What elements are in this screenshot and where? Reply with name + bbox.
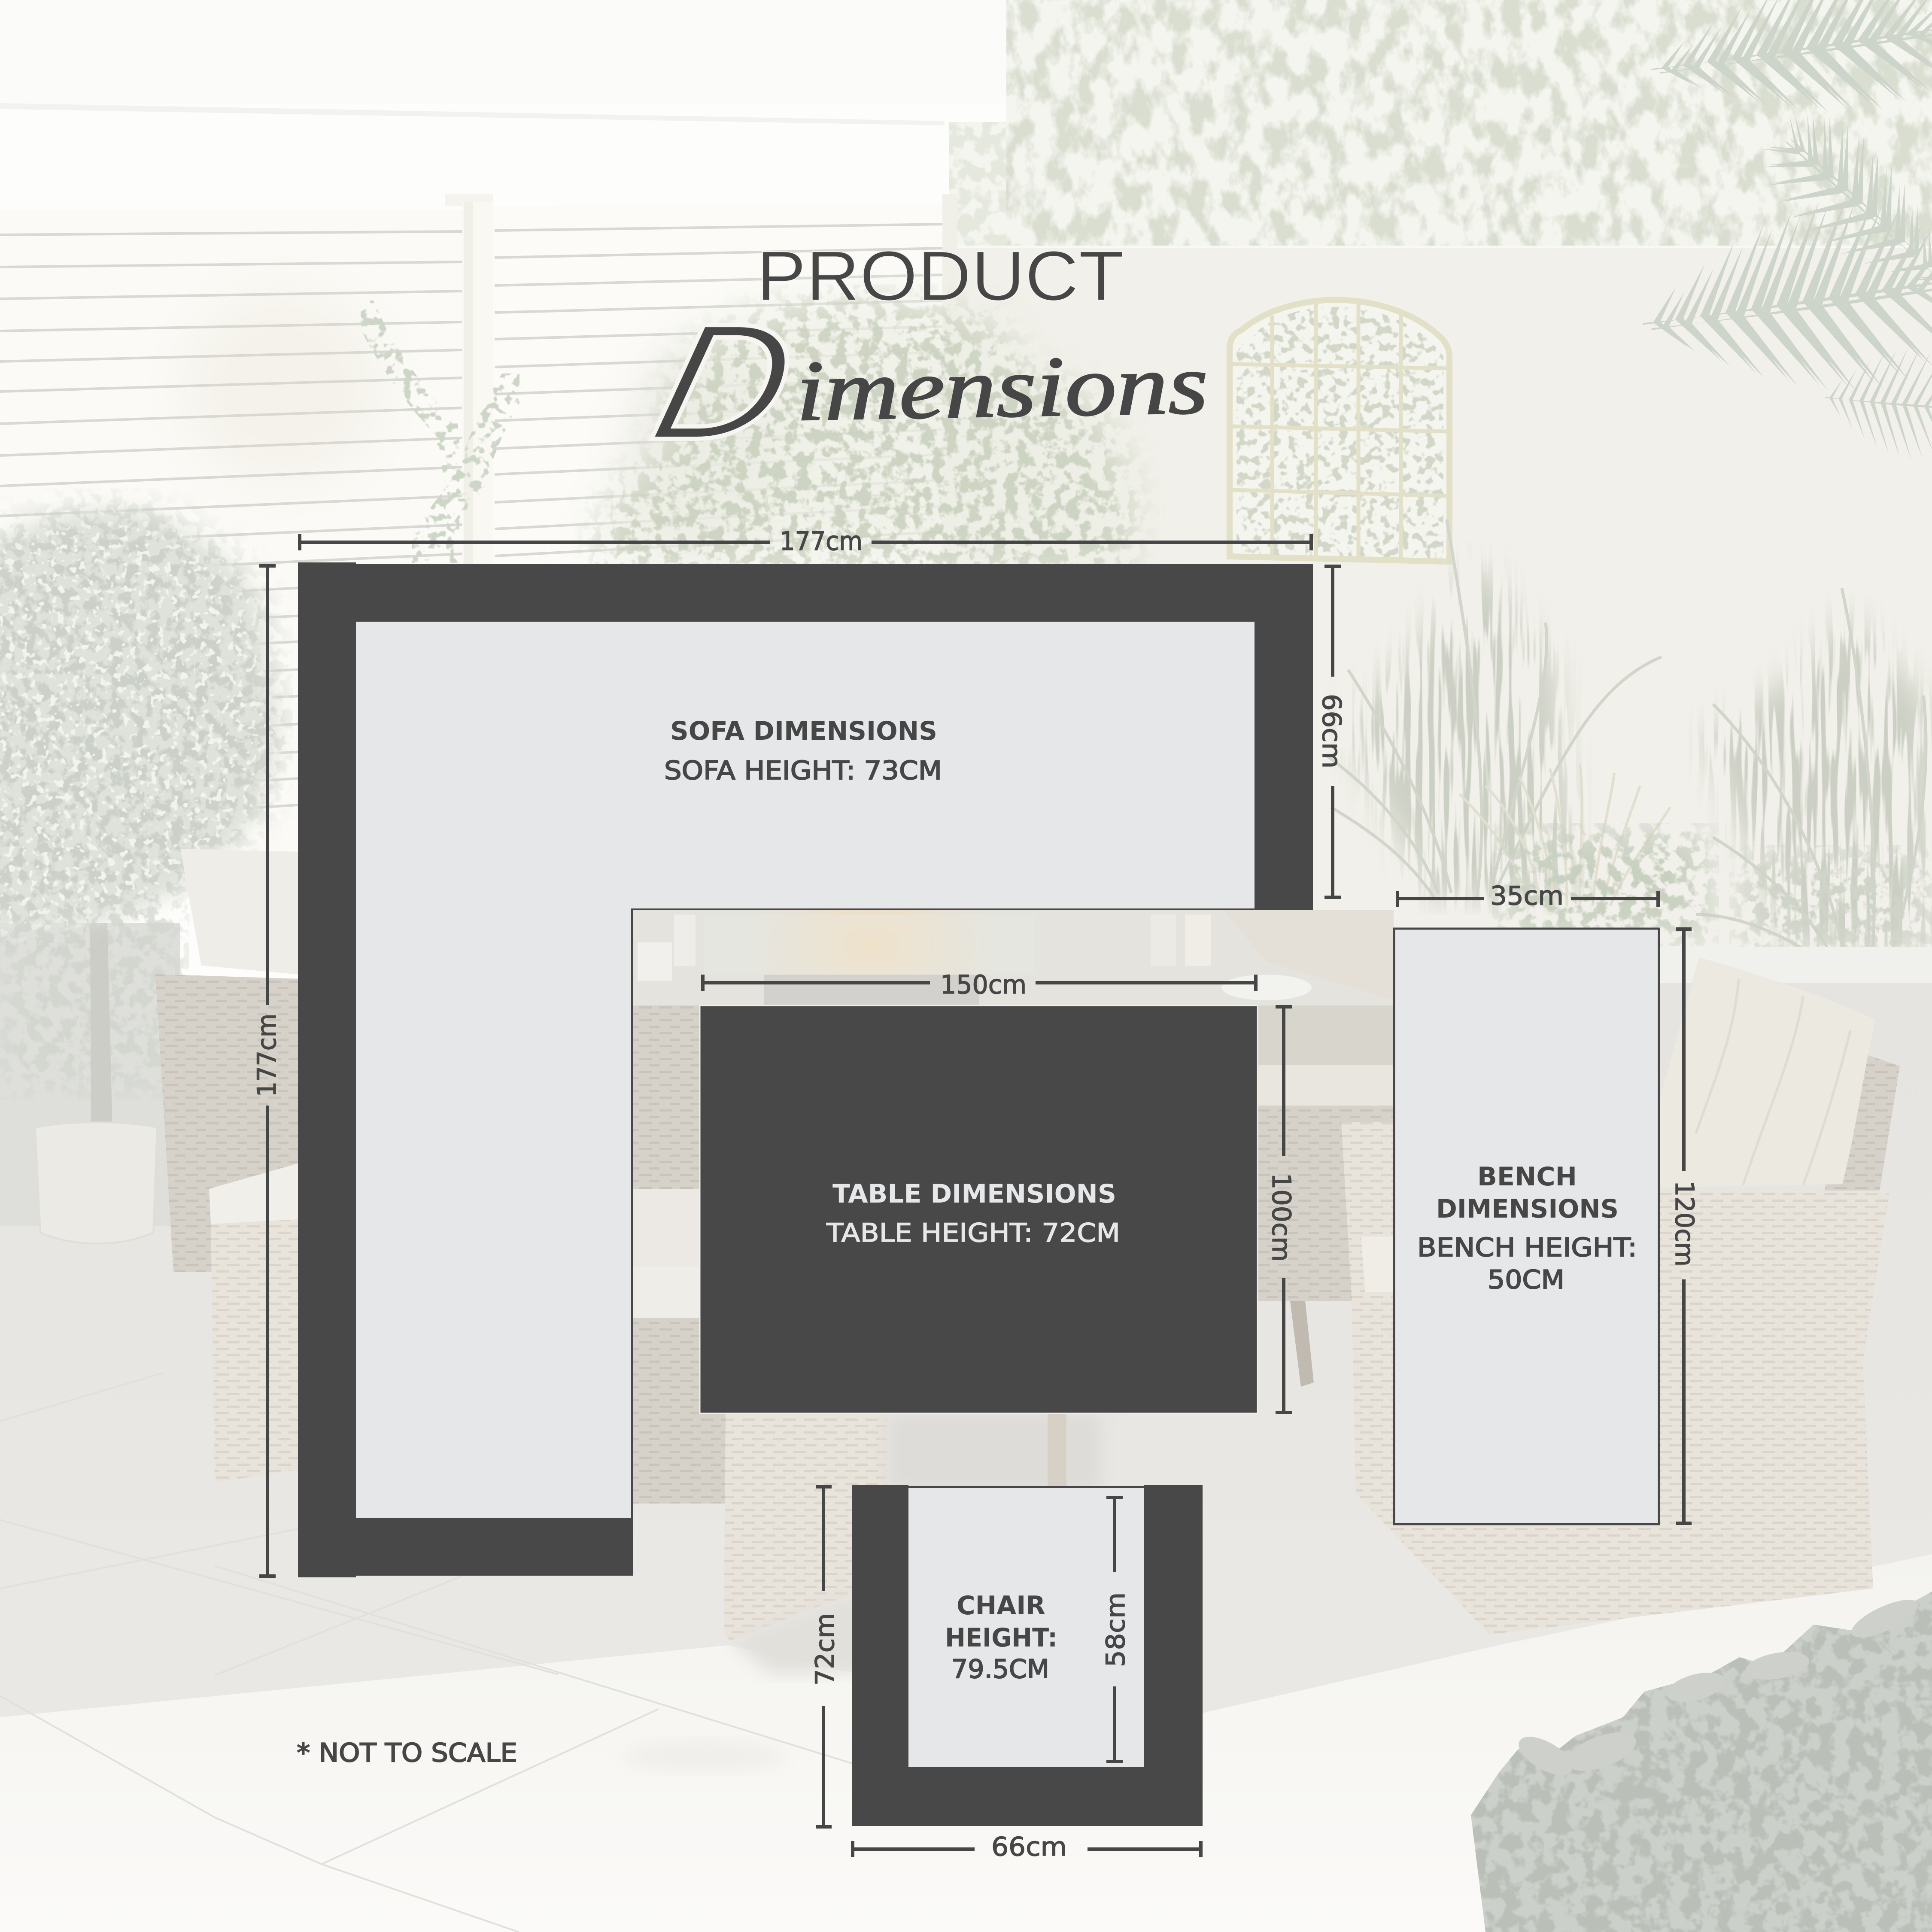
- ferns behind bench: [1503, 829, 1932, 953]
- sofa label: [664, 716, 942, 786]
- dimension: bench length 120cm: [1669, 929, 1699, 1523]
- sofa label: SOFA HEIGHT: 73CM: [664, 756, 942, 786]
- chair label: 79.5CM: [951, 1654, 1049, 1684]
- background foliage top right: [949, 0, 1932, 247]
- dimension: chair inner 58cm: 58cm: [1101, 1592, 1131, 1667]
- fire table scene behind sofa corner: [633, 872, 1394, 1018]
- ornamental grasses: [1327, 519, 1932, 966]
- bench label: BENCH: [1477, 1162, 1577, 1192]
- rendered wall: [945, 246, 1932, 977]
- inner outline of sofa corner: [632, 909, 1255, 1518]
- ivy on fence: [361, 301, 519, 563]
- dimension: bench width 35cm: [1397, 881, 1658, 911]
- dimension: chair width 66cm: 66cm: [991, 1832, 1067, 1862]
- central tree: [598, 298, 1133, 575]
- trunk of ficus: [90, 923, 112, 1133]
- planter hedge on left: [0, 910, 180, 1226]
- title: [638, 237, 1209, 474]
- title script: Dimensions: imensions: [795, 337, 1209, 439]
- chair frame: [852, 1485, 1203, 1826]
- panel: sofa L-shape: [298, 562, 1313, 1577]
- dimension: sofa depth 177cm: 177cm: [252, 1014, 282, 1097]
- low planter ledge: [1660, 947, 1932, 985]
- dimension: sofa depth 177cm: [252, 566, 282, 1577]
- ficus canopy: [0, 510, 278, 932]
- title script: Dimensions: D: [638, 289, 812, 474]
- pergola beam: [0, 0, 1006, 125]
- table label: TABLE DIMENSIONS: [832, 1179, 1116, 1209]
- dimension: bench width 35cm: 35cm: [1490, 881, 1564, 911]
- chair label: CHAIR: [957, 1591, 1045, 1621]
- dimension: sofa arm 66cm: [1316, 566, 1346, 897]
- panel: table: [700, 1005, 1258, 1413]
- dimension: chair inner 58cm: [1101, 1498, 1131, 1762]
- bench label: DIMENSIONS: [1436, 1194, 1619, 1224]
- left wicker sofa: [155, 849, 301, 1482]
- dimension: chair depth 72cm: 72cm: [810, 1613, 840, 1686]
- bench label: 50CM: [1488, 1265, 1564, 1295]
- dimension: sofa width 177cm: [298, 526, 1311, 556]
- dimension: table depth 100cm: 100cm: [1266, 1173, 1296, 1262]
- bush bottom right: [1471, 1592, 1932, 1932]
- ribbed pot: [35, 1122, 157, 1243]
- panel: bench: [1394, 929, 1659, 1524]
- sunlit fence gap: [0, 816, 73, 914]
- patio floor: [0, 983, 1932, 1932]
- dimension: chair depth 72cm: [810, 1487, 840, 1827]
- dimension: chair width 66cm: [853, 1832, 1201, 1862]
- dimension: bench length 120cm: 120cm: [1669, 1181, 1699, 1267]
- bench label: BENCH HEIGHT:: [1417, 1233, 1637, 1263]
- slatted fence: [0, 194, 957, 859]
- seat right of table: [1258, 1005, 1394, 1387]
- wall mirror: [1230, 300, 1449, 562]
- footnote: not to scale: * NOT TO SCALE: [297, 1738, 517, 1768]
- table label: TABLE HEIGHT: 72CM: [826, 1218, 1120, 1248]
- palm fronds: [1629, 0, 1932, 463]
- centre wicker chair base: [633, 1413, 1102, 1674]
- dimension: sofa arm 66cm: 66cm: [1316, 694, 1346, 769]
- dimension: sofa width 177cm: 177cm: [780, 526, 863, 556]
- dimension: table width 150cm: 150cm: [940, 970, 1027, 1000]
- title line: PRODUCT: PRODUCT: [756, 237, 1124, 315]
- dimension: table width 150cm: [703, 970, 1256, 1000]
- right wicker armchair: [1341, 957, 1900, 1634]
- table label: [826, 1179, 1120, 1248]
- chair label: HEIGHT:: [945, 1623, 1057, 1653]
- dimension: table depth 100cm: [1266, 1007, 1296, 1413]
- title script: Dimensions: [638, 289, 1209, 474]
- panel: chair: [852, 1485, 1203, 1826]
- bench label: [1417, 1162, 1637, 1295]
- sofa label: SOFA DIMENSIONS: [670, 716, 937, 746]
- sofa back frame: [298, 562, 1313, 1577]
- chair label: [945, 1591, 1057, 1684]
- left side chair in sofa corner: [633, 1005, 700, 1503]
